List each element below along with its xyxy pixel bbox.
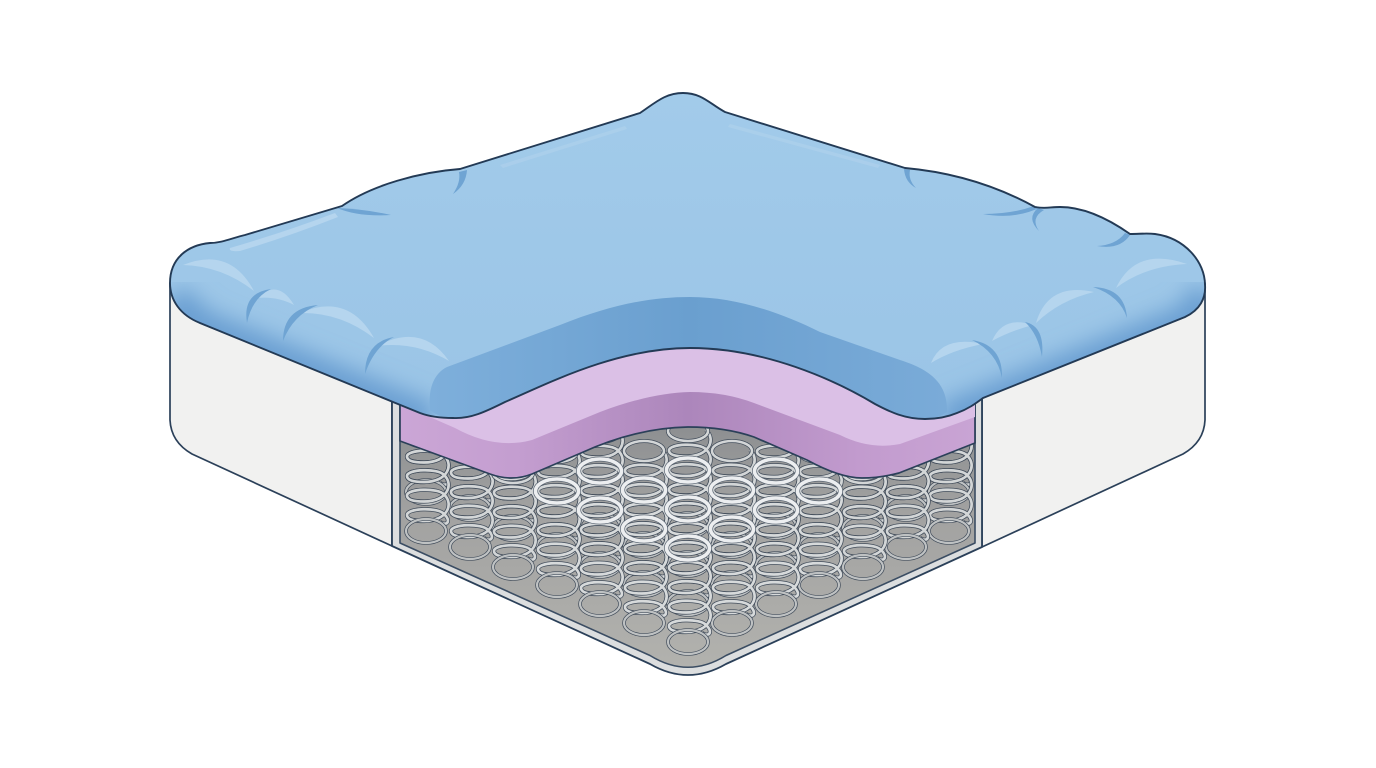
purple comfort foam layer bbox=[400, 340, 975, 478]
pocket spring array bbox=[406, 388, 972, 654]
highlights on right pillow folds bbox=[931, 259, 1187, 363]
right white side wall bbox=[982, 283, 1205, 547]
front edge shading bbox=[170, 295, 1210, 422]
illustration: mattress cutaway bbox=[169, 92, 1206, 676]
highlights on left pillow folds bbox=[183, 124, 880, 361]
cut-away base frame bbox=[392, 398, 982, 675]
left white side wall bbox=[170, 283, 392, 546]
dark crease marks bbox=[246, 169, 1130, 378]
blue top foam layer bbox=[170, 93, 1210, 422]
dark blue cut side bbox=[430, 297, 947, 419]
blue layer outline bbox=[170, 93, 1205, 419]
